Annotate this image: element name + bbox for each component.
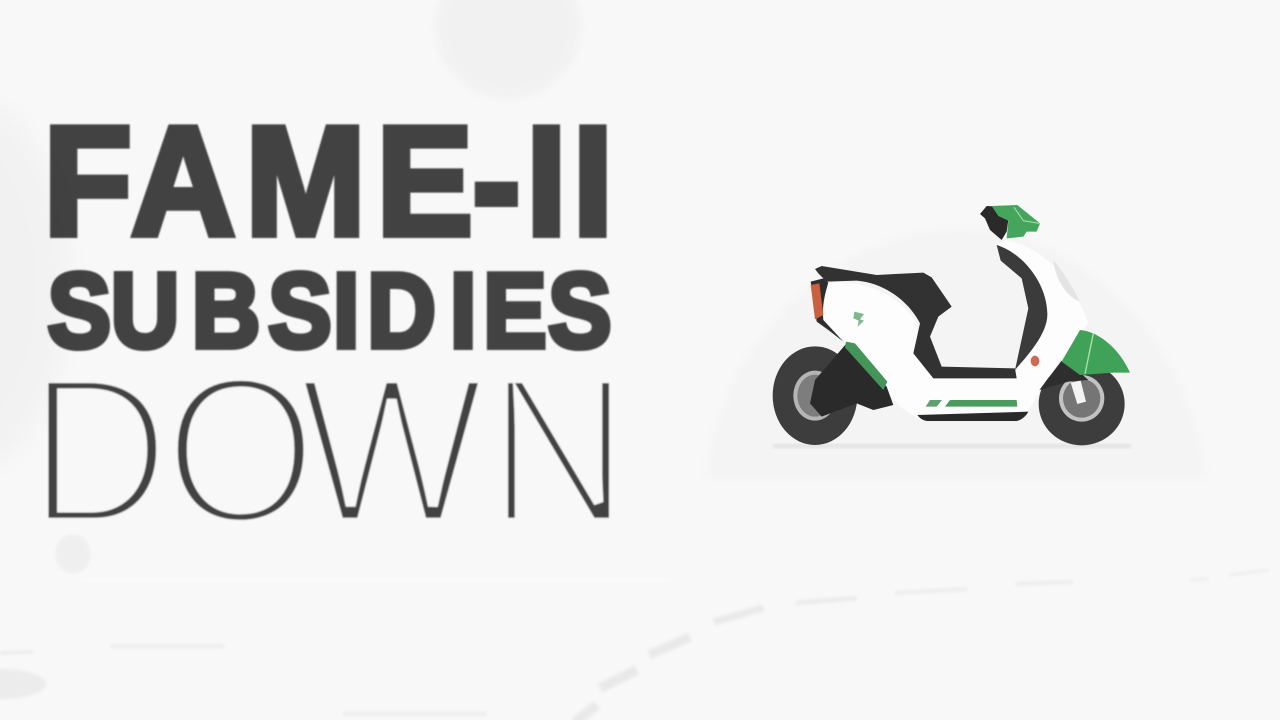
white divider line <box>80 579 670 582</box>
icon: road marker blob <box>0 669 46 699</box>
seat and floor frame <box>815 266 1017 378</box>
fork and dark fender underside <box>1039 361 1088 404</box>
title line: SUBSIDIES: SUBSIDIES <box>48 252 611 370</box>
icon: electric scooter <box>773 205 1130 445</box>
background decorations: dashed road <box>0 570 1269 720</box>
orange indicator <box>1031 356 1039 366</box>
front wheel <box>1039 363 1125 445</box>
handlebar highlight <box>1014 207 1039 223</box>
rear mudguard <box>811 278 843 342</box>
title line: DOWN: DOWN <box>27 333 630 568</box>
front green fender <box>1062 330 1130 375</box>
rear green trim <box>845 342 887 390</box>
scooter backdrop dome <box>705 228 1207 478</box>
tail light <box>811 283 823 319</box>
fender highlight <box>1085 333 1093 374</box>
handlebar green <box>992 205 1040 238</box>
charge bolt <box>853 312 864 327</box>
ground shadow <box>773 444 1131 448</box>
grey shield highlight <box>1053 260 1080 302</box>
rear cone <box>810 344 893 417</box>
front shield inner panel <box>997 245 1047 370</box>
scooter white body <box>823 240 1088 420</box>
title line: FAME-II: FAME-II <box>44 95 613 268</box>
title block <box>27 95 630 568</box>
floor stripes <box>917 400 1028 421</box>
handlebar dark <box>980 206 1008 240</box>
background decorations: circles and blobs <box>0 0 581 574</box>
rear wheel <box>773 346 857 445</box>
